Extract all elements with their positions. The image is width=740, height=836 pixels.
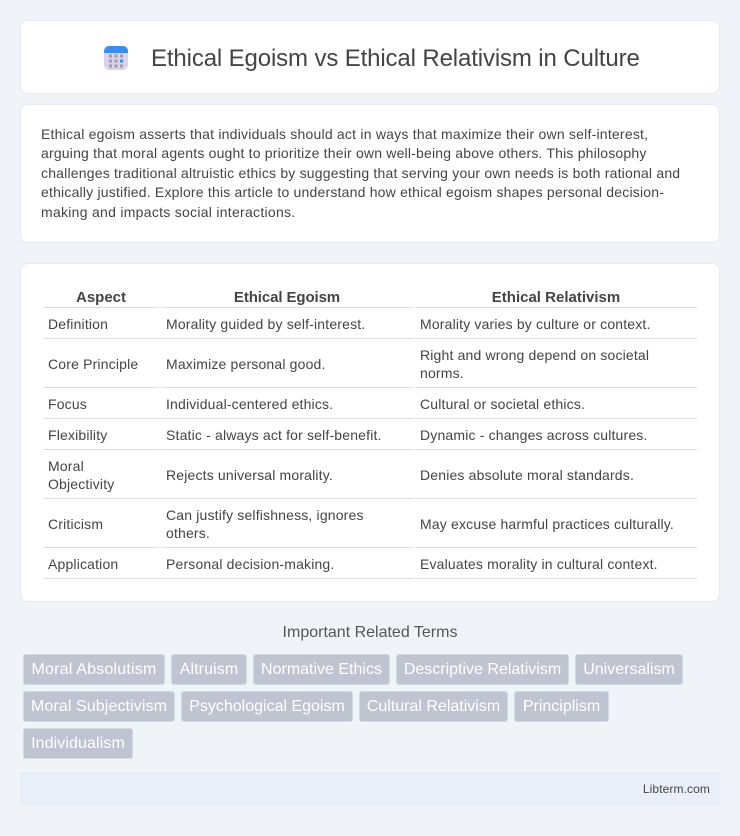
intro text: Ethical egoism asserts that individuals should act in ways that maximize their own self-interest, xyxy=(41,126,648,142)
icon: calendar xyxy=(104,46,128,70)
footer credit: Libterm.com xyxy=(643,782,710,796)
row: Focus: Individual-centered ethics. xyxy=(166,396,333,412)
related terms tags: Normative Ethics xyxy=(261,661,382,678)
intro text: ethically justified. Explore this article to understand how ethical egoism shapes personal decision- xyxy=(41,184,664,200)
header panel xyxy=(20,20,720,94)
related terms tags: Descriptive Relativism xyxy=(404,661,561,678)
table header: Aspect xyxy=(76,289,126,306)
table header: Ethical Egoism xyxy=(234,289,340,306)
row: Focus: Focus xyxy=(48,396,87,412)
related terms tags: Psychological Egoism xyxy=(189,698,345,715)
footer bar xyxy=(20,772,720,806)
related terms tags: Moral Absolutism xyxy=(31,661,157,678)
row: Moral Objectivity xyxy=(48,458,634,492)
intro text: arguing that moral agents ought to prioritize their own well-being above others. This philosophy xyxy=(41,145,647,161)
intro text: challenges traditional altruistic ethics by suggesting that serving your own needs is both rational and xyxy=(41,165,680,181)
row: Core Principle: norms. xyxy=(420,365,464,381)
row: Focus xyxy=(48,396,585,412)
row: Focus: Cultural or societal ethics. xyxy=(420,396,585,412)
row: Definition xyxy=(48,316,651,332)
row: Criticism xyxy=(48,507,674,541)
related terms tags: Cultural Relativism xyxy=(367,698,500,715)
row: Flexibility: Flexibility xyxy=(48,427,107,443)
related terms tags: Moral Subjectivism xyxy=(31,698,167,715)
row: Application: Personal decision-making. xyxy=(166,556,334,572)
row: Moral Objectivity: Denies absolute moral standards. xyxy=(420,467,634,483)
row: Criticism: Criticism xyxy=(48,516,103,532)
table header xyxy=(76,289,620,306)
related terms tags: Principlism xyxy=(523,698,600,715)
row: Application xyxy=(48,556,658,572)
row: Moral Objectivity: Moral xyxy=(48,458,84,474)
row: Flexibility: Static - always act for self-benefit. xyxy=(166,427,382,443)
row: Application: Evaluates morality in cultural context. xyxy=(420,556,658,572)
related terms tags xyxy=(23,654,683,759)
row: Core Principle: Right and wrong depend on societal xyxy=(420,347,649,363)
row: Moral Objectivity: Rejects universal morality. xyxy=(166,467,333,483)
row: Application: Application xyxy=(48,556,118,572)
row: Core Principle xyxy=(48,347,649,381)
row: Definition: Morality varies by culture or context. xyxy=(420,316,651,332)
intro text: making and impacts social interactions. xyxy=(41,204,295,220)
row: Criticism: others. xyxy=(166,525,210,541)
row: Flexibility xyxy=(48,427,648,443)
related terms heading: Important Related Terms xyxy=(283,624,457,641)
title: Ethical Egoism vs Ethical Relativism in Culture xyxy=(151,45,640,72)
related terms tags: Altruism xyxy=(180,661,238,678)
intro panel xyxy=(20,104,720,243)
row: Criticism: May excuse harmful practices culturally. xyxy=(420,516,674,532)
row: Criticism: Can justify selfishness, ignores xyxy=(166,507,364,523)
related terms tags: Universalism xyxy=(583,661,675,678)
table header: Ethical Relativism xyxy=(492,289,620,306)
comparison table panel xyxy=(20,263,720,602)
row: Definition: Morality guided by self-interest. xyxy=(166,316,365,332)
row: Core Principle: Core Principle xyxy=(48,356,138,372)
row: Core Principle: Maximize personal good. xyxy=(166,356,326,372)
intro text xyxy=(41,126,680,220)
row: Moral Objectivity: Objectivity xyxy=(48,476,114,492)
row: Flexibility: Dynamic - changes across cultures. xyxy=(420,427,648,443)
row: Definition: Definition xyxy=(48,316,108,332)
related terms tags: Individualism xyxy=(31,735,125,752)
